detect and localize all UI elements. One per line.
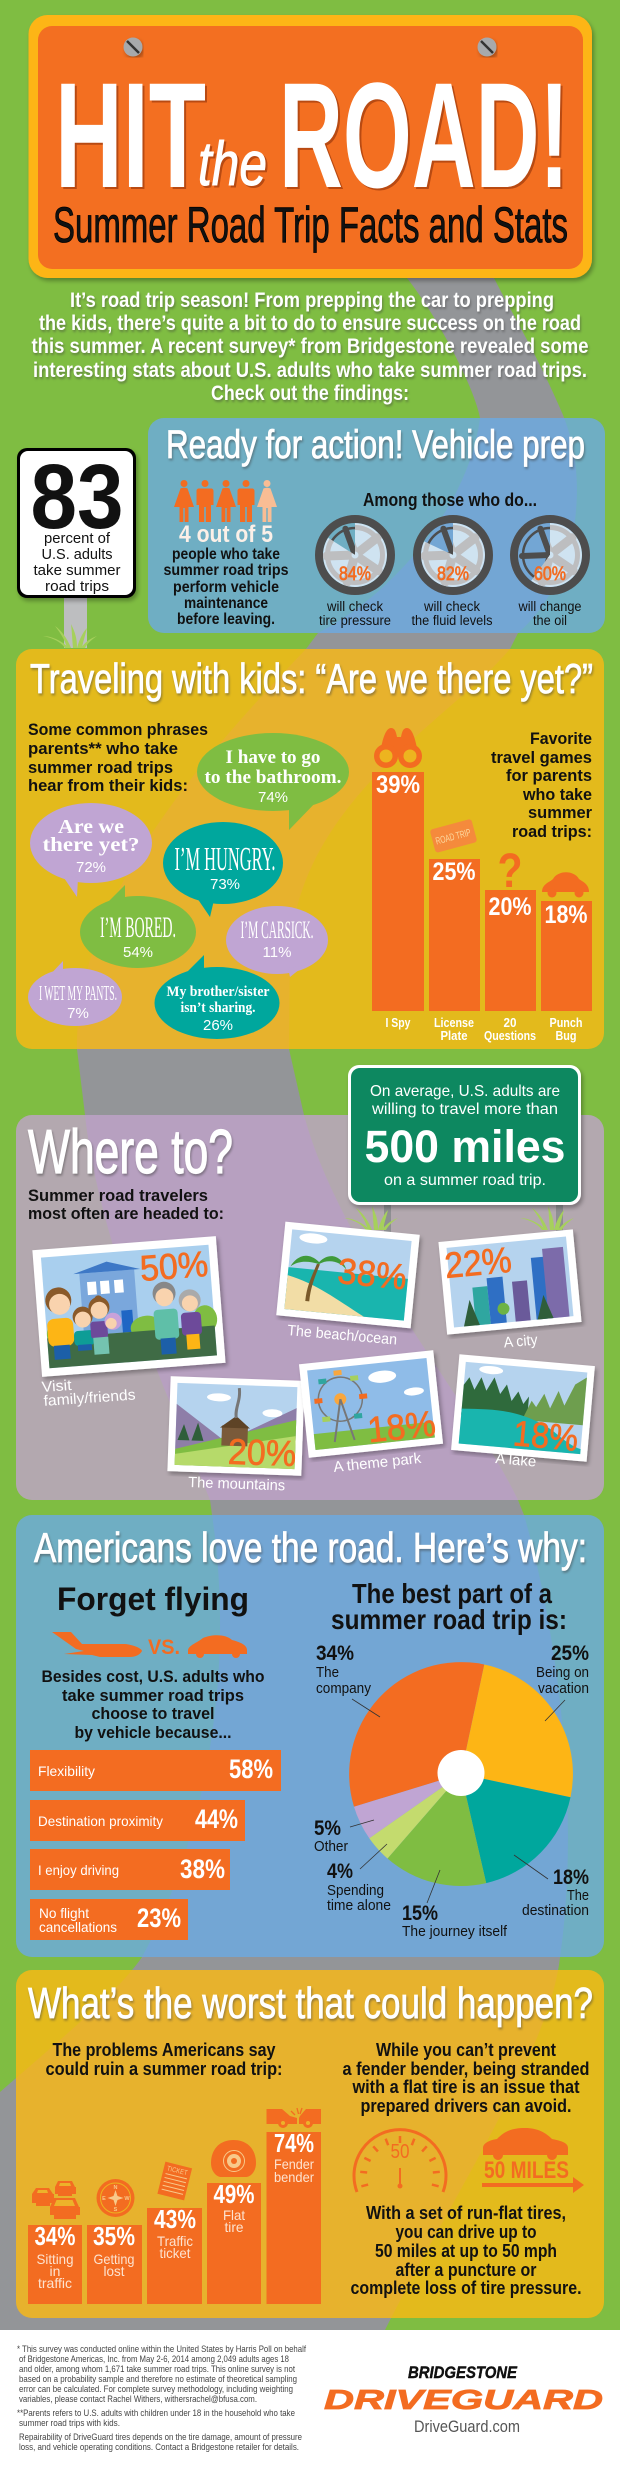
text: besides cost: take summer road trips bbox=[62, 1686, 244, 1705]
text: fender bender vs flat tire: a fender bender, being stranded bbox=[342, 2059, 590, 2079]
heading: where to: Where to? bbox=[28, 1118, 233, 1187]
road sign: 83 percent: road trips bbox=[45, 579, 109, 595]
text: 50 miles with arrow: 50 MILES bbox=[484, 2157, 569, 2184]
text: most often headed to: most often are headed to: bbox=[28, 1204, 224, 1223]
subheading: forget flying: Forget flying bbox=[57, 1581, 249, 1617]
subheading: best part: The best part of a bbox=[352, 1578, 552, 1609]
panel: vehicle prep bbox=[148, 418, 605, 633]
label: theme park: A theme park bbox=[333, 1450, 422, 1476]
bar chart: problems: Getting bbox=[94, 2251, 134, 2267]
panel: where to bbox=[16, 1065, 604, 1500]
icon: traffic cars bbox=[32, 2181, 80, 2219]
text: favorite travel games: travel games bbox=[491, 748, 592, 767]
photo: beach: 38% bbox=[336, 1250, 409, 1298]
text: favorite travel games: road trips: bbox=[512, 822, 592, 841]
intro text bbox=[32, 289, 588, 405]
bar chart: problems: 74% bbox=[274, 2128, 314, 2158]
label: the company: 34% bbox=[316, 1642, 354, 1665]
icon: binoculars bbox=[374, 728, 422, 768]
label: spending time alone: time alone bbox=[327, 1897, 391, 1914]
label: journey itself: The journey itself bbox=[402, 1923, 508, 1940]
headline: HIT bbox=[55, 51, 206, 219]
photo: theme park bbox=[299, 1350, 443, 1458]
text: favorite travel games: Favorite bbox=[530, 729, 592, 748]
photo: family bbox=[32, 1236, 226, 1377]
bar chart: travel games: Punch bbox=[550, 1015, 583, 1030]
icon: ticket: TICKET bbox=[166, 2165, 189, 2177]
pie chart: best part of a road trip bbox=[349, 1662, 573, 1903]
speech bubble: bathroom: I have to go bbox=[226, 747, 320, 768]
text: common phrases bbox=[28, 720, 208, 795]
stat: 4 out of 5: perform vehicle bbox=[173, 579, 279, 596]
speech bubble: bathroom: 74% bbox=[258, 789, 288, 806]
text: run-flat tires bbox=[350, 2203, 582, 2298]
title sign bbox=[28, 15, 592, 278]
text: common phrases: parents** who take bbox=[28, 739, 178, 758]
speech bubble: are we there yet bbox=[30, 803, 152, 897]
footnotes: summer road trips with kids. bbox=[19, 2418, 120, 2429]
headline: the bbox=[198, 130, 267, 199]
bar chart: problems: 34% bbox=[34, 2221, 76, 2251]
text: most often headed to: Summer road travelers bbox=[28, 1186, 208, 1205]
bar chart: travel games: Questions bbox=[484, 1028, 536, 1043]
speech bubble: carsick bbox=[226, 906, 328, 977]
photo: city bbox=[438, 1229, 582, 1335]
footnotes bbox=[17, 2344, 306, 2453]
speech bubble: are we there yet: there yet? bbox=[42, 834, 140, 856]
stat: 4 out of 5: 4 out of 5 bbox=[179, 521, 273, 548]
road sign: 83 percent: take summer bbox=[34, 563, 121, 579]
bar chart: reasons: cancellations bbox=[39, 1919, 117, 1935]
label: being on vacation: vacation bbox=[538, 1680, 589, 1697]
bar chart: travel games: 18% bbox=[544, 901, 588, 929]
icon: compass: W bbox=[124, 2196, 130, 2202]
icon: sedan bbox=[483, 2128, 568, 2160]
speech bubble: hungry: 73% bbox=[210, 876, 240, 893]
labels: wheel captions: will check bbox=[326, 599, 383, 614]
road sign: 83 percent: percent of bbox=[44, 531, 111, 547]
speech bubble: hungry bbox=[163, 822, 283, 917]
label: spending time alone: Spending bbox=[327, 1882, 384, 1899]
text: common phrases: Some common phrases bbox=[28, 720, 208, 739]
text: run-flat tires: after a puncture or bbox=[396, 2260, 536, 2280]
icon: speedometer: 50 bbox=[390, 2141, 410, 2163]
panel: worst that could happen bbox=[16, 1970, 604, 2318]
bar chart: reasons: No flight bbox=[39, 1905, 89, 1921]
text: fender bender vs flat tire: with a flat tire is an issue that bbox=[352, 2077, 580, 2097]
label: the destination: 18% bbox=[553, 1866, 589, 1889]
label: visit family/friends: family/friends bbox=[43, 1387, 136, 1410]
text: run-flat tires: complete loss of tire pressure. bbox=[350, 2278, 582, 2298]
bar chart: problems: 49% bbox=[214, 2179, 254, 2209]
label: being on vacation: 25% bbox=[551, 1642, 589, 1665]
bar chart: problems bbox=[28, 2128, 321, 2304]
icon: license plate: ROAD TRIP bbox=[435, 827, 472, 847]
footnotes: and older, among whom 1,671 take summer road trips. This online survey is not bbox=[19, 2364, 295, 2375]
icon: car bbox=[188, 1635, 247, 1658]
labels: wheel captions: will check bbox=[423, 599, 480, 614]
bar chart: problems: 35% bbox=[93, 2221, 135, 2251]
icon: license plate bbox=[430, 819, 477, 853]
speech bubble: carsick: 11% bbox=[263, 944, 291, 961]
bar chart: reasons bbox=[30, 1750, 281, 1940]
labels: wheel captions: the oil bbox=[533, 613, 567, 628]
bar chart: travel games: 20 bbox=[504, 1015, 516, 1030]
text: problems bbox=[46, 2040, 282, 2079]
icon: compass bbox=[96, 2179, 134, 2217]
speech bubble: sharing: My brother/sister bbox=[166, 984, 270, 1000]
footnotes: **Parents refers to U.S. adults with children under 18 in the household who take bbox=[17, 2408, 295, 2419]
icon: compass: E bbox=[102, 2196, 106, 2202]
bar chart: reasons: Flexibility bbox=[38, 1763, 95, 1779]
labels: wheel captions bbox=[319, 599, 582, 628]
bar chart: travel games: Plate bbox=[440, 1028, 468, 1043]
stat: 4 out of 5: before leaving. bbox=[177, 611, 275, 628]
bar chart: reasons: 58% bbox=[229, 1754, 273, 1784]
highway sign: 500 miles: On average, U.S. adults are bbox=[370, 1083, 560, 1100]
text: besides cost: choose to travel bbox=[92, 1704, 214, 1723]
label: mountains: The mountains bbox=[188, 1474, 285, 1494]
text: favorite travel games: who take bbox=[522, 785, 592, 804]
label: the company bbox=[316, 1642, 371, 1697]
text: common phrases: hear from their kids: bbox=[28, 776, 188, 795]
label: other: Other bbox=[314, 1838, 348, 1855]
bar chart: problems: Traffic bbox=[157, 2233, 193, 2249]
text: most often headed to bbox=[28, 1186, 224, 1223]
icon: question mark: ? bbox=[498, 845, 522, 898]
bar chart: problems: bender bbox=[274, 2169, 314, 2185]
photo: lake bbox=[451, 1354, 595, 1462]
speech bubble: bored: 54% bbox=[123, 944, 153, 961]
stat: 4 out of 5: summer road trips bbox=[164, 562, 289, 579]
bar chart: travel games: I Spy bbox=[386, 1015, 411, 1030]
stat: 4 out of 5: maintenance bbox=[184, 595, 268, 612]
footnotes: variables, please contact Rachel Withers, withersrachel@bfusa.com. bbox=[19, 2394, 257, 2405]
text: besides cost bbox=[42, 1667, 264, 1742]
text: problems: could ruin a summer road trip: bbox=[46, 2059, 282, 2079]
speech bubble: carsick: I’M CARSICK. bbox=[240, 917, 314, 944]
bar chart: problems: lost bbox=[104, 2263, 125, 2279]
bar chart: travel games: 25% bbox=[432, 858, 476, 886]
icon: compass: N bbox=[114, 2185, 118, 2191]
label: city: A city bbox=[503, 1332, 539, 1351]
speech bubble: bathroom bbox=[197, 733, 349, 830]
label: other bbox=[314, 1817, 348, 1855]
bar chart: problems: traffic bbox=[38, 2275, 72, 2291]
speech bubble: sharing: 26% bbox=[203, 1017, 233, 1034]
subheading: best part: summer road trip is: bbox=[331, 1604, 567, 1635]
bar chart: problems: Fender bbox=[274, 2156, 314, 2172]
stat: 4 out of 5: people who take bbox=[172, 546, 280, 563]
label: other: 5% bbox=[314, 1817, 341, 1840]
labels: wheel captions: tire pressure bbox=[319, 613, 391, 628]
subheading: among those who do: Among those who do... bbox=[363, 490, 537, 510]
photo: theme park: 18% bbox=[366, 1402, 437, 1450]
bar chart: problems: Flat bbox=[223, 2207, 245, 2223]
bar chart: reasons: 44% bbox=[195, 1804, 238, 1834]
bar chart: problems: 43% bbox=[154, 2204, 196, 2234]
road sign: 83 percent: U.S. adults bbox=[42, 547, 112, 563]
url: driveguard.com: DriveGuard.com bbox=[414, 2417, 520, 2436]
labels: wheel captions: will change bbox=[518, 599, 582, 614]
chart: tire pressure 84%: 84% bbox=[339, 564, 371, 585]
speech bubble: sharing bbox=[154, 955, 280, 1039]
icon: left screw bbox=[124, 38, 142, 56]
photo: lake: 18% bbox=[512, 1412, 580, 1459]
text: fender bender vs flat tire: prepared drivers can avoid. bbox=[360, 2096, 572, 2116]
label: the destination bbox=[522, 1866, 589, 1919]
label: visit family/friends bbox=[41, 1373, 136, 1410]
text: run-flat tires: 50 miles at up to 50 mph bbox=[375, 2241, 557, 2261]
bar chart: problems: tire bbox=[224, 2219, 244, 2235]
speech bubble: hungry: I’M HUNGRY. bbox=[174, 841, 276, 878]
panel: traveling with kids bbox=[16, 649, 604, 1049]
road sign: 83 percent bbox=[17, 446, 136, 648]
bar chart: problems: in bbox=[50, 2263, 60, 2279]
bar chart: travel games: Bug bbox=[556, 1028, 577, 1043]
bar chart: travel games bbox=[372, 771, 592, 1043]
label: the destination: destination bbox=[522, 1902, 589, 1919]
photo: mountains bbox=[167, 1376, 305, 1476]
winding road bbox=[0, 278, 577, 2330]
photo: beach bbox=[276, 1222, 420, 1328]
bar chart: reasons: 38% bbox=[180, 1854, 225, 1884]
label: lake: A lake bbox=[495, 1450, 537, 1471]
text: common phrases: summer road trips bbox=[28, 758, 173, 777]
chart: fluid levels 82%: 82% bbox=[437, 564, 469, 585]
intro text: Check out the findings: bbox=[211, 382, 409, 405]
icon: punch bug car bbox=[542, 872, 589, 898]
footnotes: of Bridgestone Americas, Inc. from May 2-6, 2014 among 2,049 adults ages 18 bbox=[19, 2354, 289, 2365]
icon: plane bbox=[52, 1632, 142, 1657]
label: spending time alone: 4% bbox=[327, 1860, 353, 1883]
speech bubble: are we there yet: 72% bbox=[76, 859, 106, 876]
subheading: best part bbox=[331, 1578, 567, 1635]
label: spending time alone bbox=[327, 1860, 391, 1914]
stat: 4 out of 5 bbox=[164, 521, 289, 628]
chart: tire pressure 84% bbox=[319, 519, 391, 591]
panel: traveling with kids: I WET MY PANTS. bbox=[39, 981, 117, 1005]
label: journey itself bbox=[402, 1902, 508, 1940]
text: run-flat tires: you can drive up to bbox=[396, 2222, 536, 2242]
text: problems: The problems Americans say bbox=[52, 2040, 276, 2060]
label: being on vacation bbox=[536, 1642, 589, 1697]
footnotes: error can be calculated. For complete survey methodology, including weighting bbox=[19, 2384, 293, 2395]
bar chart: reasons: I enjoy driving bbox=[38, 1862, 119, 1878]
bar chart: problems: ticket bbox=[160, 2245, 191, 2261]
speech bubble: bathroom: to the bathroom. bbox=[204, 767, 342, 788]
icon: right screw bbox=[478, 38, 496, 56]
photo: family: 50% bbox=[139, 1243, 209, 1289]
footer background bbox=[0, 2330, 620, 2465]
highway sign: 500 miles: willing to travel more than bbox=[371, 1101, 558, 1118]
photo: city: 22% bbox=[443, 1239, 513, 1286]
footnotes: loss, and vehicle operating conditions. Contact a Bridgestone retailer for details. bbox=[19, 2442, 299, 2453]
icon: speedometer bbox=[354, 2130, 446, 2192]
speech bubble: are we there yet: Are we bbox=[58, 816, 124, 838]
highway sign: 500 miles: on a summer road trip. bbox=[384, 1172, 546, 1189]
label: the company: The bbox=[316, 1664, 339, 1681]
chart: fluid levels 82% bbox=[417, 519, 489, 591]
label: beach: The beach/ocean bbox=[287, 1322, 398, 1349]
text: versus: VS. bbox=[148, 1636, 180, 1659]
label: visit family/friends: Visit bbox=[41, 1377, 73, 1396]
icon: flat tire bbox=[211, 2140, 256, 2177]
text: besides cost: by vehicle because... bbox=[74, 1723, 232, 1742]
text: favorite travel games: summer bbox=[528, 803, 592, 822]
highway sign: 500 miles bbox=[344, 1065, 581, 1237]
speech bubble: sharing: isn’t sharing. bbox=[180, 1000, 256, 1016]
logo: bridgestone: BRIDGESTONE bbox=[408, 2363, 518, 2382]
icon: ticket bbox=[157, 2162, 192, 2200]
label: the destination: The bbox=[567, 1887, 589, 1904]
text: fender bender vs flat tire bbox=[342, 2040, 590, 2116]
icon: fender bender bbox=[266, 2108, 321, 2128]
intro text: It’s road trip season! From prepping the car to prepping bbox=[70, 289, 554, 312]
footnotes: * This survey was conducted online within the United States by Harris Poll on behalf bbox=[17, 2344, 306, 2355]
label: the company: company bbox=[316, 1680, 371, 1697]
headline bbox=[55, 51, 569, 219]
icon: compass: S bbox=[114, 2207, 118, 2213]
chart: oil 60% bbox=[514, 519, 586, 591]
footnotes: Repairability of DriveGuard tires depends on the tire damage, amount of pressure bbox=[19, 2432, 302, 2443]
labels: wheel captions: the fluid levels bbox=[412, 613, 493, 628]
speech bubble: wet pants: 7% bbox=[67, 1005, 89, 1022]
text: favorite travel games: for parents bbox=[506, 766, 592, 785]
speech bubble: wet pants bbox=[28, 961, 122, 1026]
chart: oil 60%: 60% bbox=[534, 564, 566, 585]
bar chart: problems: Sitting bbox=[36, 2251, 74, 2267]
bar chart: reasons: Destination proximity bbox=[38, 1813, 163, 1829]
bar chart: reasons: 23% bbox=[137, 1903, 181, 1933]
logo: driveguard: DRIVEGUARD bbox=[324, 2384, 603, 2415]
panel: why americans love the road bbox=[16, 1515, 604, 1957]
speech bubble: bored: I’M BORED. bbox=[100, 911, 176, 944]
road sign: 83 percent: 83 bbox=[30, 446, 124, 548]
footnotes: based on a probability sample and therefore no estimate of theoretical sampling bbox=[19, 2374, 297, 2385]
bar chart: travel games: 39% bbox=[376, 771, 420, 799]
text: favorite travel games bbox=[491, 729, 592, 841]
bar chart: travel games: 20% bbox=[488, 893, 532, 921]
speech bubble: bored bbox=[80, 885, 196, 968]
label: being on vacation: Being on bbox=[536, 1664, 589, 1681]
text: run-flat tires: With a set of run-flat tires, bbox=[366, 2203, 566, 2223]
photo: mountains: 20% bbox=[227, 1431, 297, 1474]
icon: 4 of 5 people bbox=[174, 480, 277, 522]
label: journey itself: 15% bbox=[402, 1902, 438, 1925]
text: fender bender vs flat tire: While you can’t prevent bbox=[376, 2040, 556, 2060]
highway sign: 500 miles: 500 miles bbox=[364, 1121, 566, 1172]
text: besides cost: Besides cost, U.S. adults who bbox=[42, 1667, 264, 1686]
bar chart: travel games: License bbox=[434, 1015, 474, 1030]
